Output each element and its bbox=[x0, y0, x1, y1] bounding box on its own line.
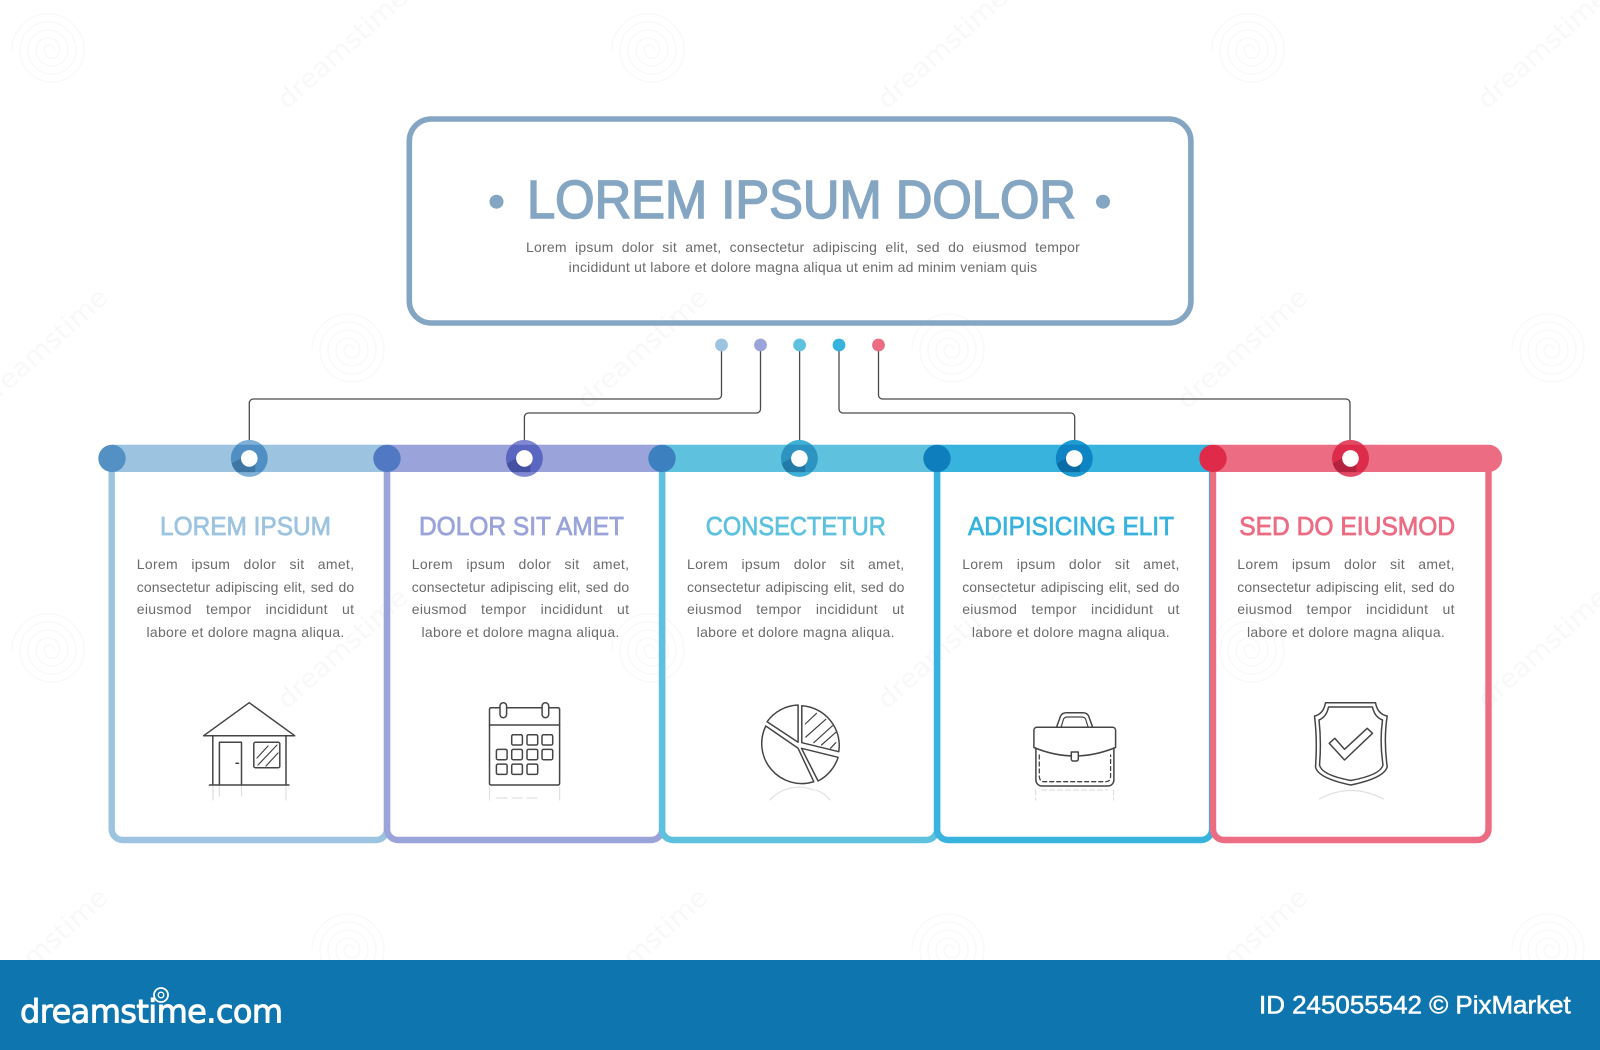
watermark pattern: dreamstime bbox=[572, 283, 714, 415]
header frame and title: LOREM IPSUM DOLOR bbox=[527, 170, 1076, 230]
body text: eiusmod tempor incididunt ut bbox=[687, 601, 904, 617]
body text: eiusmod tempor incididunt ut bbox=[137, 601, 354, 617]
panel: header box bbox=[406, 116, 1194, 326]
body text bbox=[962, 556, 1180, 640]
body text: labore et dolore magna aliqua. bbox=[697, 624, 895, 640]
body text: consectetur adipiscing elit, sed do bbox=[1237, 579, 1455, 595]
panel: adipisicing elit bbox=[923, 440, 1212, 844]
icon: pie chart bbox=[762, 705, 839, 800]
icon: shield bbox=[1314, 703, 1387, 799]
body text: labore et dolore magna aliqua. bbox=[421, 624, 620, 640]
body text bbox=[687, 556, 904, 640]
card graphics bbox=[648, 440, 940, 844]
panel: sed do eiusmod bbox=[1199, 440, 1502, 844]
watermark pattern: dreamstime bbox=[872, 583, 1014, 715]
header description: Lorem ipsum dolor sit amet, consectetur adipiscing elit, sed do eiusmod tempor bbox=[526, 239, 1080, 255]
panel: dolor sit amet bbox=[373, 440, 666, 844]
panel: consectetur bbox=[648, 440, 940, 844]
card graphics bbox=[98, 440, 390, 844]
heading: LOREM IPSUM bbox=[160, 511, 331, 541]
body text: labore et dolore magna aliqua. bbox=[1247, 624, 1445, 640]
body text: consectetur adipiscing elit, sed do bbox=[412, 579, 629, 595]
header description bbox=[526, 239, 1080, 275]
header frame and title bbox=[406, 116, 1194, 326]
body text: Lorem ipsum dolor sit amet, bbox=[1237, 556, 1455, 572]
body text: eiusmod tempor incididunt ut bbox=[1237, 601, 1455, 617]
icon: briefcase bbox=[1034, 713, 1116, 800]
footer banner bbox=[0, 960, 1600, 1050]
heading: SED DO EIUSMOD bbox=[1239, 511, 1455, 541]
body text: Lorem ipsum dolor sit amet, bbox=[962, 556, 1180, 572]
body text: consectetur adipiscing elit, sed do bbox=[962, 579, 1180, 595]
body text: consectetur adipiscing elit, sed do bbox=[137, 579, 354, 595]
header description: incididunt ut labore et dolore magna aliqua ut enim ad minim veniam quis bbox=[569, 259, 1037, 275]
footer logo: dreamstime.com bbox=[20, 993, 283, 1031]
panel: lorem ipsum bbox=[98, 440, 390, 844]
heading: DOLOR SIT AMET bbox=[419, 511, 624, 541]
body text: consectetur adipiscing elit, sed do bbox=[687, 579, 904, 595]
body text bbox=[412, 556, 629, 640]
body text: Lorem ipsum dolor sit amet, bbox=[687, 556, 904, 572]
card graphics bbox=[1199, 440, 1502, 844]
watermark pattern: dreamstime bbox=[572, 883, 714, 1015]
heading: ADIPISICING ELIT bbox=[968, 511, 1174, 541]
icon: house bbox=[204, 703, 295, 800]
card graphics bbox=[923, 440, 1212, 844]
icon: calendar bbox=[490, 703, 560, 800]
body text: eiusmod tempor incididunt ut bbox=[962, 601, 1180, 617]
heading: CONSECTETUR bbox=[706, 511, 886, 541]
body text: eiusmod tempor incididunt ut bbox=[412, 601, 629, 617]
body text bbox=[137, 556, 354, 640]
watermark pattern: dreamstime bbox=[272, 583, 414, 715]
watermark pattern: dreamstime bbox=[1172, 283, 1314, 415]
body text bbox=[1237, 556, 1455, 640]
watermark pattern: dreamstime bbox=[1172, 883, 1314, 1015]
body text: labore et dolore magna aliqua. bbox=[146, 624, 345, 640]
body text: Lorem ipsum dolor sit amet, bbox=[412, 556, 629, 572]
image credit: ID 245055542 © PixMarket bbox=[1259, 991, 1571, 1019]
card graphics bbox=[373, 440, 666, 844]
body text: labore et dolore magna aliqua. bbox=[972, 624, 1170, 640]
body text: Lorem ipsum dolor sit amet, bbox=[137, 556, 354, 572]
